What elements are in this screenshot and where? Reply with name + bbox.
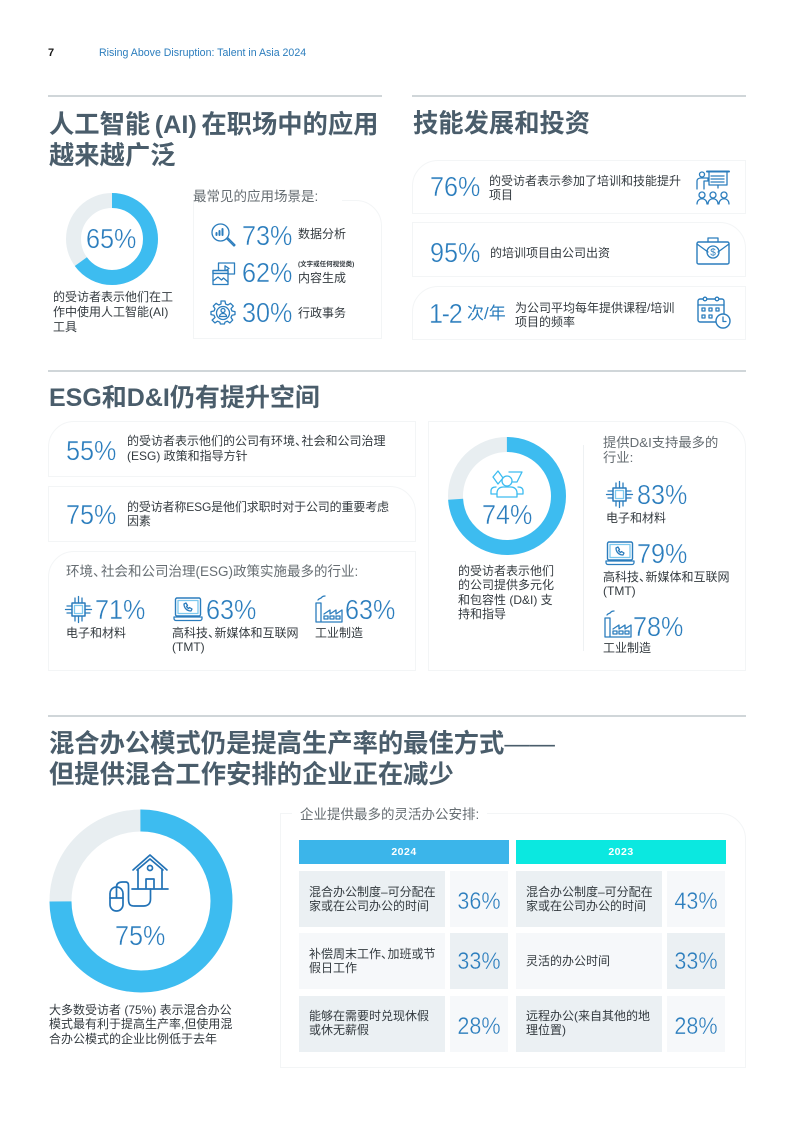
text: company funded training: 的培训项目由公司出资	[490, 246, 610, 260]
row 3 text 2023	[526, 1009, 650, 1037]
text: training participation	[489, 174, 681, 202]
row 2 label 2023	[516, 933, 662, 989]
subheading: ESG industries: 环境、社会和公司治理(ESG)政策实施最多的行业:	[66, 564, 358, 579]
AI usage caption	[53, 290, 173, 334]
label: TMT: (TMT)	[603, 584, 636, 598]
hybrid caption: 合办公模式的企业比例低于去年	[49, 1032, 217, 1046]
page number: 7	[48, 47, 54, 59]
heading: AI in the workplace: 人工智能(AI)在职场中的应用	[49, 111, 378, 139]
donut value: 74%: 74%	[482, 499, 532, 530]
row 1 text 2024	[309, 885, 436, 913]
row 3 text 2024	[309, 1009, 429, 1037]
table header: 2023: 2023	[608, 846, 634, 858]
row 2 text 2024: 假日工作	[309, 961, 357, 975]
panel: AI use cases	[193, 200, 382, 339]
icon: factory	[604, 610, 632, 638]
label: TMT	[603, 570, 730, 598]
stat: 83%: 83%	[637, 479, 687, 510]
heading: ESG and D&I: ESG和D&I仍有提升空间	[49, 384, 320, 412]
subheading: D&I industries	[603, 435, 718, 465]
text: ESG importance	[127, 500, 389, 528]
panel: company funded training	[412, 222, 746, 277]
row 3 label 2023	[516, 996, 662, 1052]
heading: AI in the workplace	[49, 110, 378, 170]
stat: 78%: 78%	[633, 611, 683, 642]
panel: training frequency	[412, 286, 746, 340]
label: electronics: 电子和材料	[66, 626, 126, 640]
panel: flexible work arrangements	[280, 813, 746, 1068]
panel: ESG policy	[48, 421, 416, 477]
stat: 76%: 76%	[430, 171, 480, 202]
label: electronics: 电子和材料	[606, 511, 666, 525]
panel: ESG industries	[48, 551, 416, 671]
text: training participation: 的受访者表示参加了培训和技能提升	[489, 174, 681, 188]
label: TMT: (TMT)	[172, 640, 205, 654]
text: ESG importance: 因素	[127, 514, 151, 528]
row 3 label 2024	[299, 996, 445, 1052]
heading: skills development: 技能发展和投资	[413, 110, 590, 138]
row 1 text 2024: 混合办公制度–可分配在	[309, 885, 436, 899]
donut value: 75%: 75%	[115, 920, 165, 951]
row 1 value 2024: 36%	[457, 888, 501, 915]
row 1 label 2024	[299, 871, 445, 927]
icon: images	[212, 262, 236, 286]
donut: 75%	[50, 810, 232, 992]
stat: 1-2: 1-2	[429, 298, 461, 329]
heading: hybrid work	[49, 730, 555, 789]
stat: 62%: 62%	[242, 257, 292, 288]
icon: chip	[606, 480, 634, 508]
stat: 63%: 63%	[345, 594, 395, 625]
stat: 95%: 95%	[430, 237, 480, 268]
icon: calendar clock	[697, 296, 731, 329]
label: data analysis: 数据分析	[298, 227, 346, 241]
stat: 73%: 73%	[242, 220, 292, 251]
donut: 74%	[448, 437, 566, 555]
text: ESG policy	[127, 434, 386, 463]
row 2 value cell 2023	[667, 933, 725, 989]
row 1 value 2023: 43%	[674, 888, 718, 915]
row 3 text 2023: 理位置)	[526, 1023, 566, 1037]
D&I caption: 的受访者表示他们	[458, 564, 554, 578]
stat: 55%: 55%	[66, 435, 116, 466]
label: TMT: 高科技、新媒体和互联网	[603, 570, 730, 584]
table header: 2023	[516, 840, 726, 864]
text: ESG policy: 的受访者表示他们的公司有环境、社会和公司治理	[127, 434, 386, 448]
icon: briefcase with dollar: $	[710, 248, 716, 258]
donut: 65%	[66, 193, 158, 285]
text: ESG policy: (ESG) 政策和指导方针	[127, 449, 248, 463]
row 3 value 2023: 28%	[674, 1013, 718, 1040]
label: industrial manufacturing: 工业制造	[315, 626, 363, 640]
text: training participation: 项目	[489, 188, 513, 202]
D&I caption	[458, 564, 554, 621]
row 3 value cell 2023	[667, 996, 725, 1052]
row 2 text 2023: 灵活的办公时间	[526, 954, 610, 968]
D&I caption: 持和指导	[458, 607, 506, 621]
panel: ESG importance	[48, 486, 416, 542]
icon: gear person	[210, 300, 236, 325]
label: TMT	[172, 626, 299, 654]
row 1 text 2023: 混合办公制度–可分配在	[526, 885, 653, 899]
row 2 value cell 2024	[450, 933, 508, 989]
label: TMT: 高科技、新媒体和互联网	[172, 626, 299, 640]
icon: presenter and audience	[696, 170, 730, 205]
row 1 text 2023: 家或在公司办公的时间	[526, 899, 646, 913]
row 2 label 2024	[299, 933, 445, 989]
label: industrial manufacturing: 工业制造	[603, 641, 651, 655]
icon: laptop phone	[605, 541, 635, 566]
hybrid caption: 模式最有利于提高生产率,但使用混	[49, 1017, 232, 1031]
label: content generation note: (文字或任何视觉类)	[298, 261, 354, 268]
stat: 71%: 71%	[95, 594, 145, 625]
table header: 2024	[299, 840, 509, 864]
heading: hybrid work: 混合办公模式仍是提高生产率的最佳方式——	[49, 730, 555, 758]
row 1 text 2024: 家或在公司办公的时间	[309, 899, 429, 913]
table header: 2024: 2024	[391, 846, 417, 858]
row 2 value 2024: 33%	[457, 948, 501, 975]
panel top edge gap behind subheading	[192, 198, 342, 202]
text: training frequency	[515, 301, 674, 329]
heading: hybrid work: 但提供混合工作安排的企业正在减少	[49, 761, 454, 789]
running title: Rising Above Disruption: Talent in Asia 2024	[99, 47, 306, 59]
donut value: 65%: 65%	[86, 223, 136, 254]
subheading: D&I industries: 提供D&I支持最多的	[603, 435, 718, 450]
stat: 79%: 79%	[637, 538, 687, 569]
row 3 text 2024: 能够在需要时兑现休假	[309, 1009, 429, 1023]
hybrid caption: 大多数受访者 (75%) 表示混合办公	[49, 1003, 232, 1017]
label: admin tasks: 行政事务	[298, 306, 346, 320]
AI usage caption: 工具	[53, 320, 77, 334]
icon: laptop phone	[173, 597, 203, 622]
stat: 30%: 30%	[242, 297, 292, 328]
AI usage caption: 的受访者表示他们在工	[53, 290, 173, 304]
stat: 75%: 75%	[66, 499, 116, 530]
label: content generation: 内容生成	[298, 271, 346, 285]
heading: AI in the workplace: 越来越广泛	[49, 142, 176, 170]
icon: people group	[490, 470, 524, 498]
panel: training participation	[412, 160, 746, 214]
stat: 63%: 63%	[206, 594, 256, 625]
icon: factory	[315, 595, 343, 623]
row 2 text 2024	[309, 947, 436, 975]
unit: times per year: 次/年	[467, 304, 506, 323]
text: training frequency: 为公司平均每年提供课程/培训	[515, 301, 674, 315]
icon: magnifier chart	[211, 223, 236, 247]
row 3 value cell 2024	[450, 996, 508, 1052]
icon: briefcase with dollar	[696, 237, 730, 265]
row 2 text 2024: 补偿周末工作、加班或节	[309, 947, 436, 961]
text: training frequency: 项目的频率	[515, 315, 575, 329]
row 1 value cell 2024	[450, 871, 508, 927]
text: ESG importance: 的受访者称ESG是他们求职时对于公司的重要考虑	[127, 500, 389, 514]
row 1 text 2023	[526, 885, 653, 913]
row 3 text 2023: 远程办公(来自其他的地	[526, 1009, 650, 1023]
subheading: flexible arrangements: 企业提供最多的灵活办公安排:	[300, 807, 479, 822]
subheading: common use cases: 最常见的应用场景是:	[193, 189, 318, 204]
row 1 label 2023	[516, 871, 662, 927]
panel: D&I	[428, 421, 746, 671]
AI usage caption: 作中使用人工智能(AI)	[53, 305, 168, 319]
icon: chip	[64, 596, 92, 624]
hybrid caption	[49, 1003, 232, 1046]
row 3 value 2024: 28%	[457, 1013, 501, 1040]
row 1 value cell 2023	[667, 871, 725, 927]
subheading: D&I industries: 行业:	[603, 450, 633, 465]
row 2 value 2023: 33%	[674, 948, 718, 975]
D&I caption: 和包容性 (D&I) 支	[458, 593, 553, 607]
row 3 text 2024: 或休无薪假	[309, 1023, 369, 1037]
D&I caption: 的公司提供多元化	[458, 578, 554, 592]
icon: house and mouse	[109, 854, 169, 912]
